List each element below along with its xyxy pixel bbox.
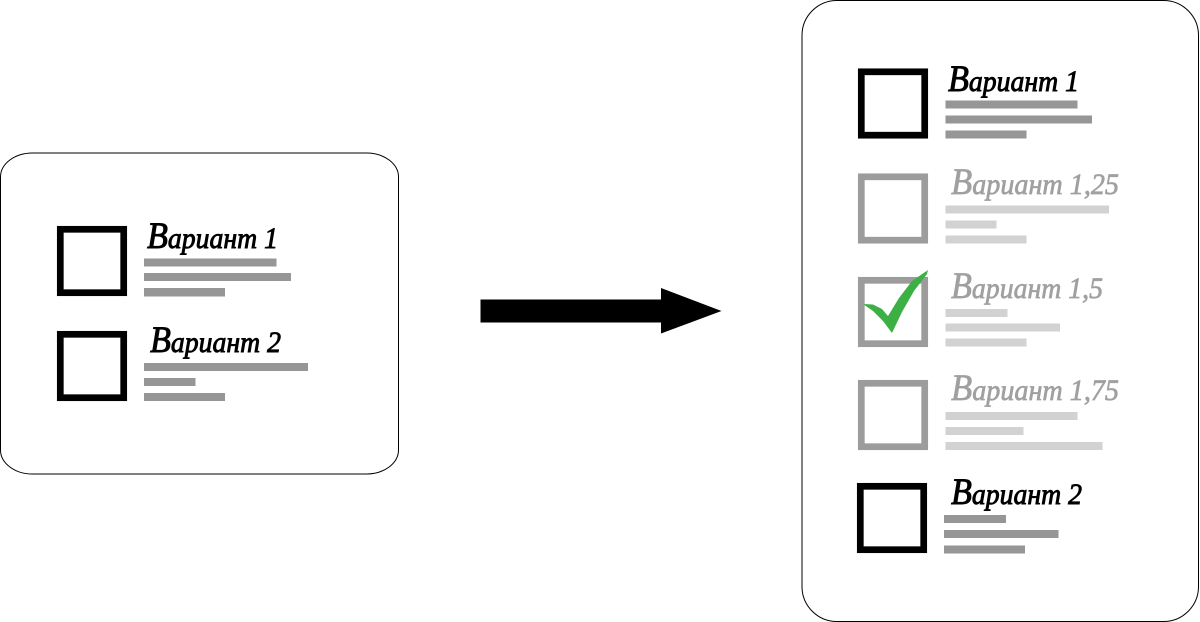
panel: after, five options [802, 0, 1198, 622]
option: Вариант 2: Вариант 2 [150, 320, 281, 361]
option: Вариант 2: Вариант 2 [951, 472, 1082, 513]
option: Вариант 1,75: Вариант 1,75 [951, 368, 1119, 409]
option: Вариант 1,25 [861, 162, 1119, 244]
option: Вариант 1,5 with check mark [861, 266, 1103, 346]
arrow [480, 288, 722, 334]
option: Вариант 1 [60, 216, 291, 296]
option: Вариант 1,5 with check mark: Вариант 1,5 [951, 266, 1103, 307]
option: Вариант 2 [860, 472, 1082, 554]
panel: before, two options [0, 153, 398, 474]
option: Вариант 1,75 [861, 368, 1119, 450]
option: Вариант 1: Вариант 1 [147, 216, 278, 257]
option: Вариант 1,25: Вариант 1,25 [951, 162, 1119, 203]
option: Вариант 2 [60, 320, 308, 401]
option: Вариант 1 [861, 59, 1092, 138]
option: Вариант 1: Вариант 1 [948, 59, 1079, 100]
icon: green check mark [863, 270, 928, 333]
